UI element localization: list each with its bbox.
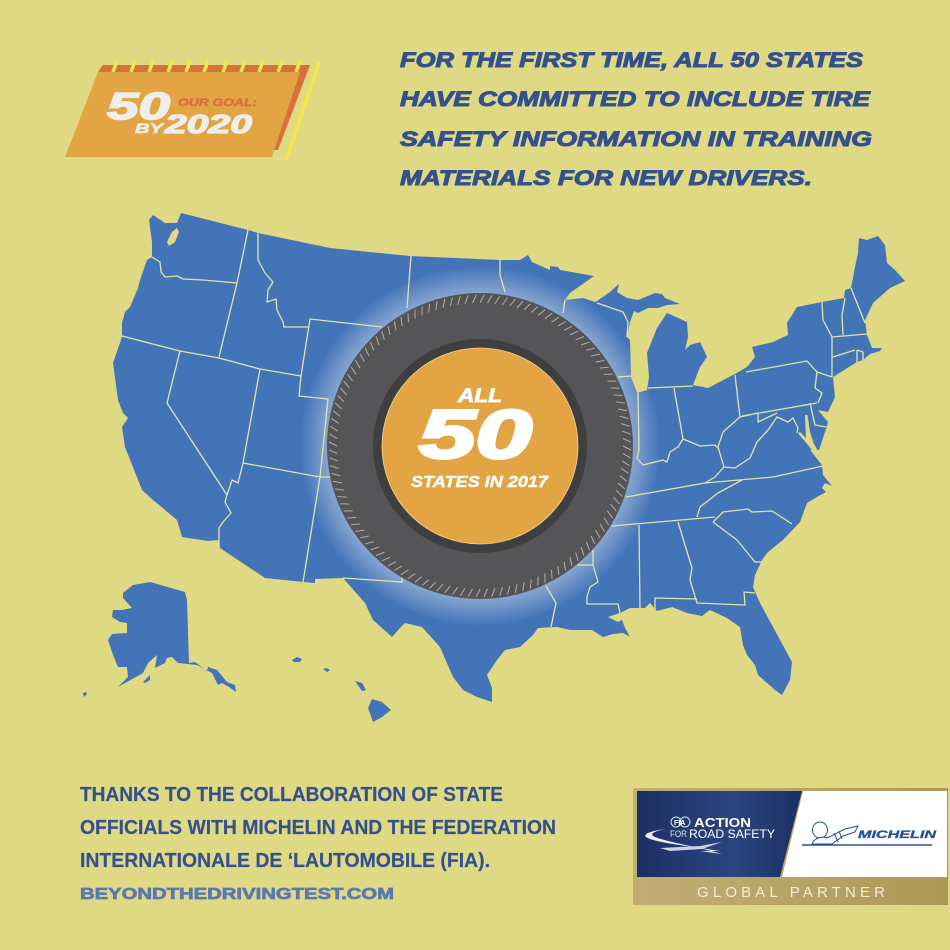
tire with all 50 states: 50 [419,396,532,473]
map of the United States [83,213,905,722]
tire with all 50 states [249,230,680,695]
heading: MATERIALS FOR NEW DRIVERS. [400,166,812,190]
badge: 50 by 2020 goal: 50 [107,86,170,128]
contiguous states [113,213,905,702]
Bibendum figure [812,822,858,844]
heading: FOR THE FIRST TIME, ALL 50 STATES [400,48,864,72]
heading: SAFETY INFORMATION IN TRAINING [400,127,872,151]
heading: HAVE COMMITTED TO INCLUDE TIRE [400,87,871,111]
Alaska [83,582,236,697]
badge: 50 by 2020 goal: BY [135,120,165,136]
Michelin panel: MICHELIN [858,829,938,841]
FIA panel: FIA [674,820,685,827]
FIA panel: ROAD SAFETY [689,829,775,841]
thanks text [80,784,556,872]
thanks text: INTERNATIONALE DE ‘LAUTOMOBILE (FIA). [80,850,490,872]
Puget Sound and Chesapeake Bay [167,228,818,451]
badge: 50 by 2020 goal [65,61,321,160]
tire with all 50 states: ALL [457,386,502,407]
thanks text: OFFICIALS WITH MICHELIN AND THE FEDERATION [80,817,556,839]
global partner label: GLOBAL PARTNER [697,884,885,901]
heading [400,48,872,190]
tire tread [249,230,680,695]
FIA panel: ACTION [694,815,751,830]
state borders [122,230,867,627]
orange hub [382,348,578,544]
tire glow [300,266,660,626]
website: BEYONDTHEDRIVINGTEST.COM [80,886,394,903]
partner logo panel [633,788,948,905]
badge: 50 by 2020 goal: OUR GOAL: [178,97,257,109]
tire with all 50 states: STATES IN 2017 [411,474,549,491]
Hawaii [292,657,391,722]
FIA panel [637,791,802,877]
badge: 50 by 2020 goal: 2020 [163,109,253,139]
swoosh [645,829,722,854]
thanks text: THANKS TO THE COLLABORATION OF STATE [80,784,503,806]
Michelin panel [782,791,947,877]
FIA panel: FOR [670,829,687,839]
